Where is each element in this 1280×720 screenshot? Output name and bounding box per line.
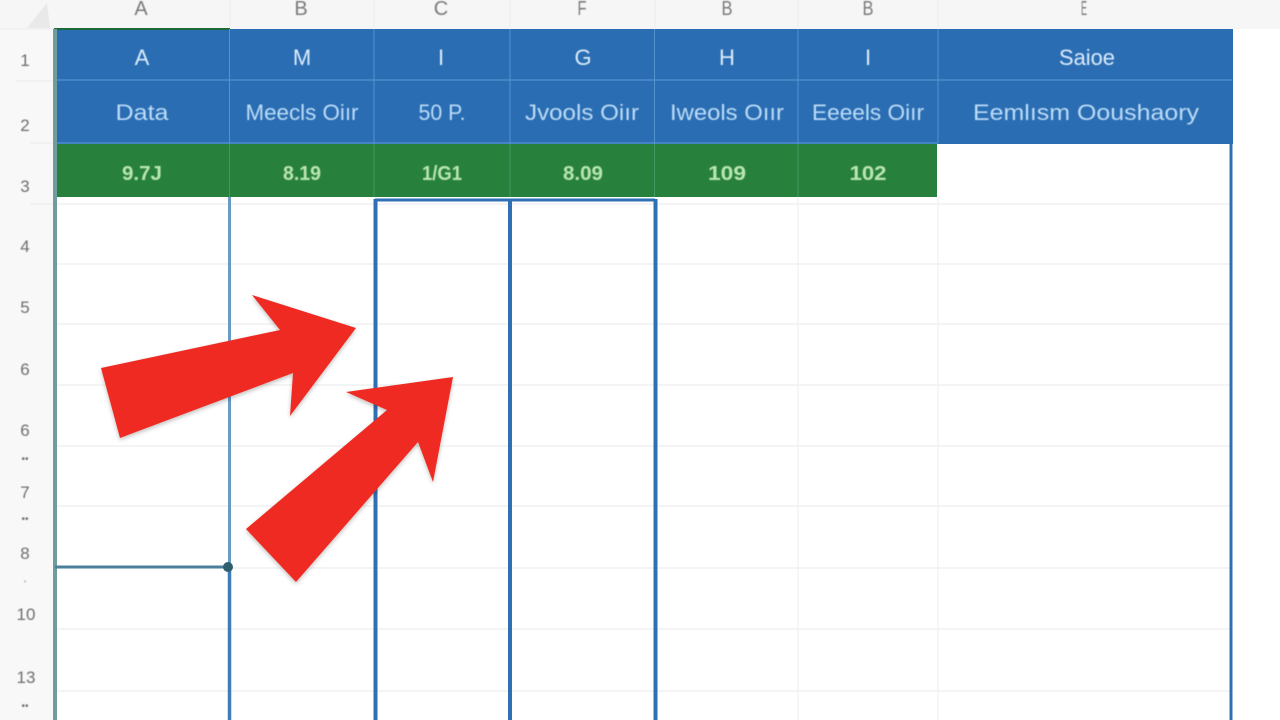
row header strip: 10	[17, 605, 35, 624]
green value row: 1/G1	[422, 163, 462, 185]
table header row 2: Eeeels Oiır	[812, 100, 924, 125]
row header strip	[0, 29, 54, 720]
table header row 1	[54, 28, 1233, 197]
table header row 2: Data	[116, 100, 169, 125]
row header strip: 13	[17, 668, 35, 687]
table header row 1: I	[865, 45, 871, 70]
table header row 1: H	[719, 45, 735, 70]
table header row 2	[116, 100, 1199, 125]
row header strip: 5	[20, 298, 30, 317]
row header strip: 6	[20, 421, 30, 440]
row header strip: ••	[21, 701, 29, 712]
row header strip: 6	[20, 360, 30, 379]
green value row: 109	[708, 163, 746, 185]
table header row 2: Jvools Oiır	[525, 100, 639, 125]
green value row: 8.19	[283, 163, 321, 185]
table header row 1: G	[574, 45, 592, 70]
column header strip	[0, 0, 1280, 29]
selected cell border and handle	[55, 562, 233, 572]
row header strip: 7	[20, 483, 30, 502]
green value row	[55, 144, 937, 197]
row header strip: 8	[20, 544, 30, 563]
row header strip: •	[24, 577, 27, 586]
table header row 1: M	[293, 45, 311, 70]
row header strip: ••	[21, 514, 29, 525]
table header row 1: I	[438, 45, 444, 70]
row header strip: 3	[20, 177, 30, 196]
arrow 1	[101, 295, 356, 438]
table header row 2: 50 P.	[418, 100, 466, 125]
table header row 2: Eemlısm Ooushaory	[973, 100, 1199, 125]
row header strip: 1	[20, 51, 30, 70]
green value row: 102	[850, 163, 886, 185]
row header strip: 4	[20, 237, 30, 256]
green value row: 8.09	[563, 163, 603, 185]
arrow 2	[246, 377, 453, 582]
table header row 1: A	[135, 45, 150, 70]
green value row: 9.7J	[122, 163, 162, 185]
row header strip: ••	[21, 454, 29, 465]
table header row 1: Saioe	[1059, 45, 1115, 70]
table header row 2: Iweols Oıır	[670, 100, 784, 125]
table header row 2: Meecls Oiır	[246, 100, 358, 125]
row header strip: 2	[20, 116, 30, 135]
